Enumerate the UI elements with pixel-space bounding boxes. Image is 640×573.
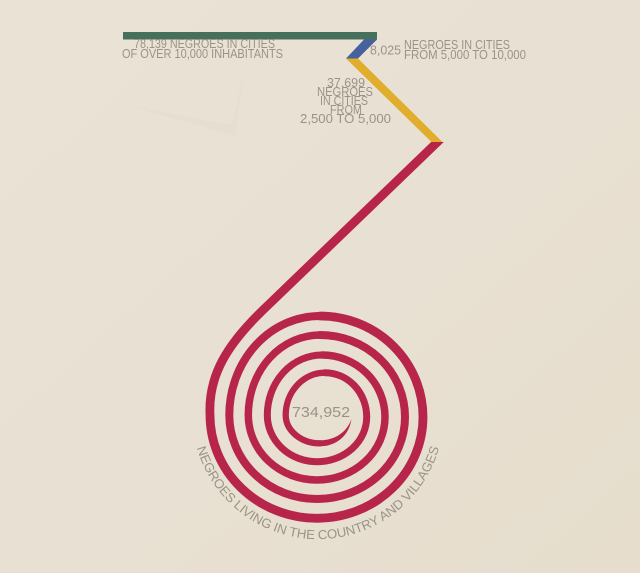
inner spiral ring (286, 373, 325, 443)
third spiral ring (248, 335, 385, 480)
label: 37,699 cities 2,500 to 5,000: 2,500 TO 5,000 (300, 112, 391, 126)
paper stain (130, 72, 244, 136)
label: 8,025 cities 5,000 to 10,000: 8,025 (370, 44, 401, 58)
label: 8,025 cities 5,000 to 10,000: NEGROES IN CITIES (404, 38, 510, 52)
spiral tapered tip (320, 419, 352, 446)
label: 37,699 cities 2,500 to 5,000: 37,699 (327, 76, 365, 90)
label: 78,139 cities over 10,000: 78,139 NEGROES IN CITIES (134, 37, 275, 51)
label: 78,139 cities over 10,000: OF OVER 10,000 INHABITANTS (122, 47, 283, 61)
segment: red line and spiral, country and villages (210, 138, 442, 518)
red diagonal and outer spiral ring (210, 138, 442, 518)
infographic: population spiral on paper (122, 32, 526, 540)
segment: green bar, cities over 10,000 (123, 32, 377, 40)
label: 8,025 cities 5,000 to 10,000: FROM 5,000 TO 10,000 (404, 48, 526, 62)
segment: yellow, cities 2,500 to 5,000 (346, 58, 443, 142)
second spiral ring (229, 316, 405, 499)
label: 78,139 cities over 10,000 (122, 37, 283, 61)
segment: blue, cities 5,000 to 10,000 (346, 40, 377, 58)
label: curved caption: NEGROES LIVING IN THE COUNTRY AND VILLAGES (197, 446, 438, 540)
fourth spiral ring (267, 355, 367, 462)
label: 37,699 cities 2,500 to 5,000: FROM (330, 103, 362, 117)
label: 8,025 cities 5,000 to 10,000 (370, 38, 526, 62)
label: 37,699 cities 2,500 to 5,000: NEGROES (317, 85, 373, 99)
label: 37,699 cities 2,500 to 5,000: IN CITIES (320, 94, 368, 108)
label: 734,952: 734,952 (292, 404, 350, 421)
label: 37,699 cities 2,500 to 5,000 (300, 76, 391, 126)
